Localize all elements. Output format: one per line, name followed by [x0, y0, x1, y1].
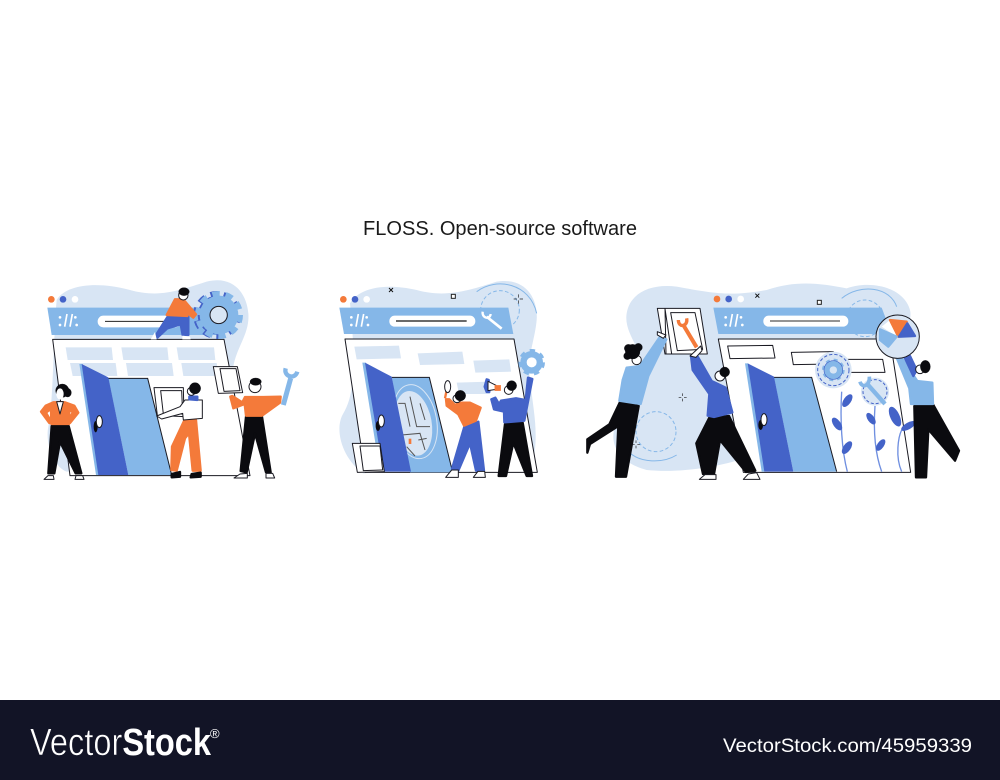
window controls [340, 296, 370, 303]
page window [718, 339, 911, 472]
door with maze [362, 363, 453, 472]
sparkle lower [632, 440, 640, 448]
close mark [755, 294, 759, 298]
logo: VectorStock [30, 722, 212, 764]
decoration arc top [842, 289, 897, 307]
panel: team building a web page with gear and wrench [41, 280, 297, 479]
door [745, 363, 837, 472]
man with wrench [213, 367, 297, 478]
browser bar [339, 308, 513, 334]
outlined tiles [728, 345, 885, 372]
gear flower [815, 352, 855, 472]
close mark [389, 288, 393, 292]
page window [53, 339, 250, 476]
background blob [339, 281, 537, 473]
decoration arc left [628, 452, 677, 461]
panel: team fixing page with flowers and pie chart [587, 284, 959, 479]
page tiles [354, 346, 511, 394]
gear [198, 296, 238, 334]
browser bar [713, 308, 892, 334]
door [79, 364, 172, 475]
man with panel [154, 383, 202, 477]
image reference: VectorStock.com/45959339 [723, 736, 972, 757]
dashed circle top [847, 300, 883, 337]
small panel on floor [352, 443, 384, 472]
dashed circle [481, 291, 519, 329]
decoration arc [477, 284, 537, 313]
right man with pie chart [876, 315, 959, 477]
page window [345, 339, 537, 472]
sparkle [514, 294, 523, 304]
title: FLOSS. Open-source software [363, 218, 637, 240]
left man holding panel [587, 308, 707, 477]
browser bar [47, 308, 220, 335]
page tiles [66, 347, 219, 376]
background blob [48, 280, 248, 472]
man with magnifier [445, 381, 485, 477]
man with megaphone and gear [485, 351, 543, 476]
wrench flower [860, 377, 889, 472]
kneeling man [151, 288, 196, 339]
middle man pushing [690, 346, 760, 479]
leaf plant [886, 405, 917, 472]
square mark [451, 294, 455, 298]
registered mark: ® [210, 726, 220, 741]
square mark [817, 300, 821, 304]
dashed circle left [636, 412, 676, 452]
window controls [714, 296, 744, 302]
woman in orange jacket [41, 384, 84, 479]
footer bar [0, 700, 1000, 780]
window controls [48, 296, 78, 303]
background blob [613, 284, 911, 471]
sparkle [679, 393, 687, 401]
panel: team exploring maze behind door [339, 281, 543, 477]
